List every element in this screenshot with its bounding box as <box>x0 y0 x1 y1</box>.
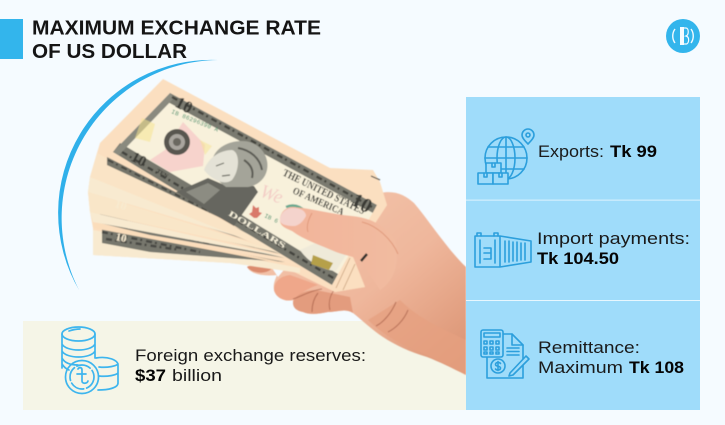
icon: calculator and invoice <box>481 330 529 378</box>
red treasury mark <box>249 205 262 218</box>
photo: hand holding dollar bills <box>88 79 466 375</box>
icon: coin stacks <box>62 327 118 394</box>
bill text: THE UNITED STATES <box>281 168 367 217</box>
beige panel: foreign exchange reserves <box>23 321 466 410</box>
text: exports rate: Tk 99 <box>610 143 657 161</box>
fingernail <box>280 208 306 226</box>
fanned lower bills: 10 <box>113 196 129 213</box>
fanned lower bills: 10 <box>114 231 128 245</box>
top ten dollar bill: DOLLARS <box>227 209 288 251</box>
text: remittance rate: Tk 108 <box>629 359 684 377</box>
text: foreign exchange reserves <box>135 347 366 385</box>
text: exports rate: Exports: <box>538 143 604 161</box>
title accent block <box>0 19 23 59</box>
top ten dollar bill: 10 <box>348 189 376 218</box>
text: foreign exchange reserves: $37 <box>135 367 166 385</box>
thumb <box>280 207 397 290</box>
top ten dollar bill: 10 <box>172 93 196 118</box>
top ten dollar bill: TEN <box>155 169 169 180</box>
title: OF US DOLLAR <box>32 40 187 63</box>
top ten dollar bill: 10 <box>128 149 149 171</box>
bill borders <box>166 93 377 213</box>
security tint <box>150 122 205 172</box>
top ten dollar bill: IB 86296390 A <box>170 108 220 134</box>
fanned lower bills <box>88 153 300 273</box>
row: import payments <box>475 230 690 268</box>
blue panel: rates <box>466 97 700 410</box>
hand body <box>247 192 466 375</box>
back stack of bills <box>88 79 387 292</box>
top ten dollar bill: OF AMERICA <box>291 186 346 218</box>
portrait of Hamilton <box>176 141 267 226</box>
text: foreign exchange reserves: billion <box>172 367 222 385</box>
gold ten numeral <box>300 240 346 271</box>
icon: shipping container <box>475 233 531 267</box>
row: remittance <box>481 330 684 378</box>
text: import payments rate <box>537 230 690 268</box>
text: import payments rate: Tk 104.50 <box>537 250 619 268</box>
icon: globe with boxes <box>478 129 534 184</box>
title: MAXIMUM EXCHANGE RATE <box>32 16 321 40</box>
text: exports rate <box>538 143 657 161</box>
text: remittance rate: Remittance: <box>538 339 640 357</box>
text: remittance rate: Maximum <box>538 359 623 377</box>
title <box>32 16 321 63</box>
right stack edge <box>332 205 387 292</box>
text: remittance rate <box>538 339 684 377</box>
row: exports <box>478 129 657 184</box>
text: foreign exchange reserves: Foreign exchange reserves: <box>135 347 366 365</box>
decorative curved arc <box>58 60 218 290</box>
treasury seal <box>164 129 190 155</box>
text: import payments rate: Import payments: <box>537 230 690 248</box>
top ten dollar bill: We <box>257 181 286 208</box>
top ten dollar bill <box>113 93 377 285</box>
logo badge <box>666 19 700 53</box>
top ten dollar bill: IB 6 <box>263 212 280 225</box>
